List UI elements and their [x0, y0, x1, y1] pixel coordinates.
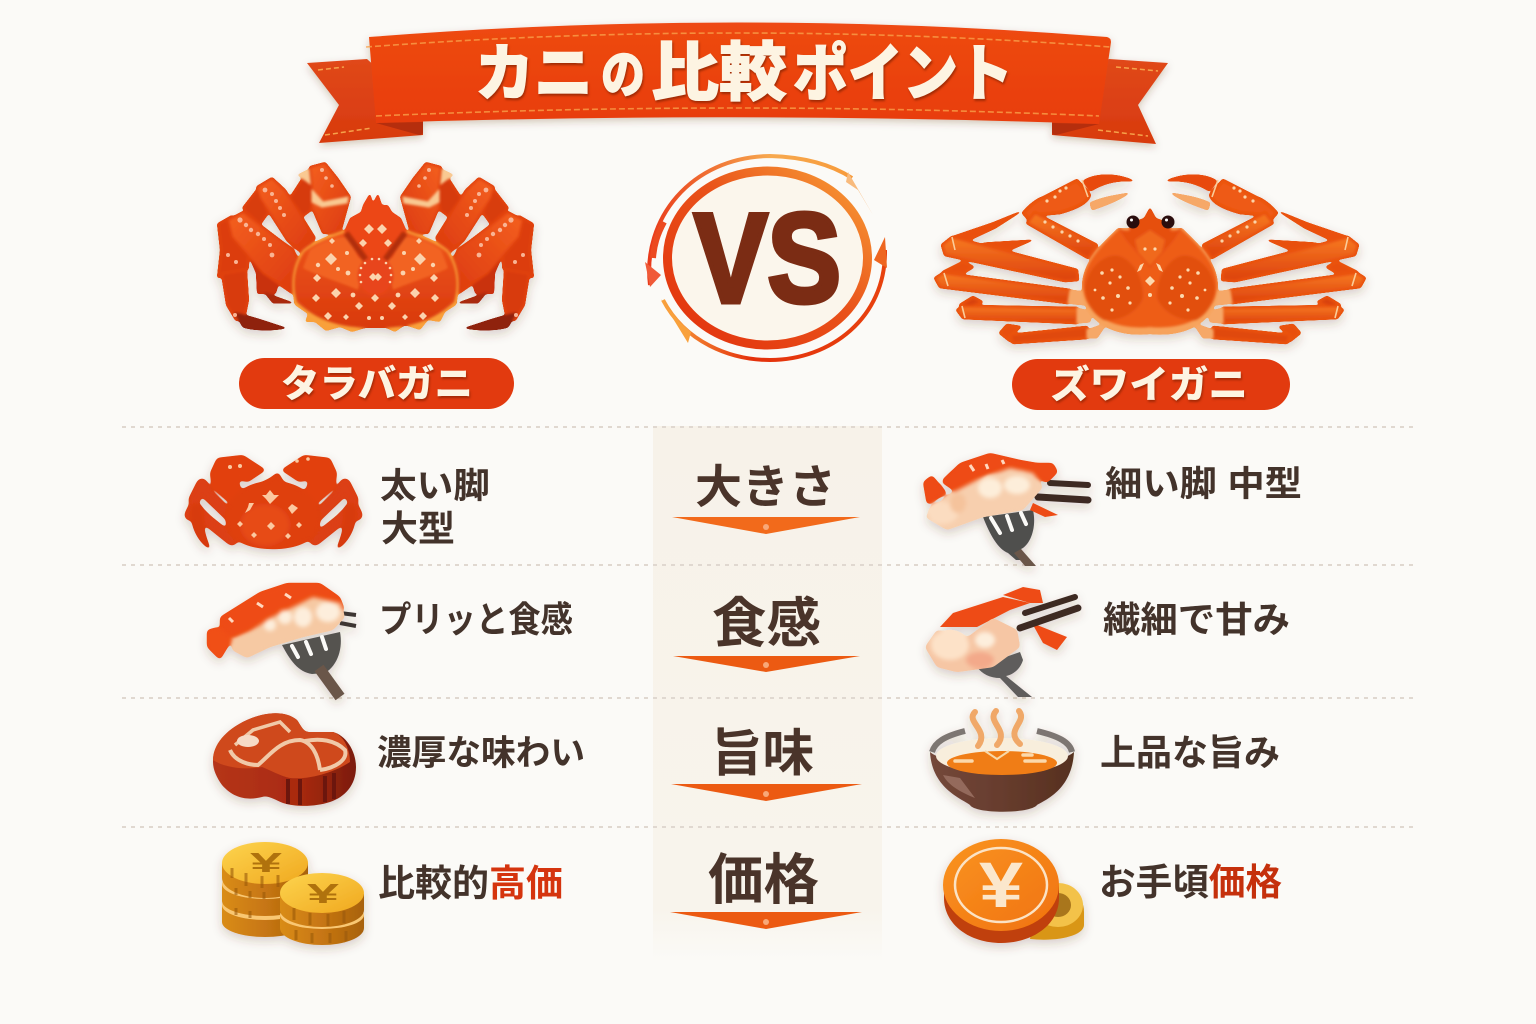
name label: タラバガニ: タラバガニ [281, 364, 473, 406]
icon: crab meat with fork and chopsticks [923, 453, 1088, 566]
left text: プリッと食感 [379, 599, 573, 640]
row: 価格 [222, 839, 1282, 945]
icon: gold coin stacks: ¥ [307, 878, 340, 909]
right text: 繊細で甘み [1103, 599, 1290, 640]
icon: orange yen coin: ¥ [979, 849, 1024, 921]
left text: 濃厚な味わい [377, 734, 585, 773]
title text: ポイント [793, 40, 1013, 109]
center label: 旨味 [711, 725, 814, 782]
center label: 大きさ [695, 461, 836, 513]
center arrow [671, 784, 862, 801]
icon: crab meat on fork [207, 583, 356, 697]
left text: 太い脚 大型: 大型 [381, 508, 455, 549]
right text: お手頃価格 [1099, 862, 1282, 903]
crab illustration: snow crab [935, 175, 1365, 343]
row: 食感 [207, 583, 1290, 697]
left text: 太い脚 大型 [380, 467, 490, 549]
icon: orange yen coin [943, 839, 1084, 943]
icon: crab meat with chopsticks [925, 587, 1078, 697]
center label: 食感 [712, 594, 821, 654]
right text: 上品な旨み [1100, 732, 1280, 773]
row dividers [122, 427, 1414, 827]
row: 旨味 [213, 711, 1280, 812]
icon: steak [213, 713, 356, 806]
icon: gold coin stacks [222, 842, 364, 945]
center arrow [672, 517, 860, 534]
title text: の [601, 47, 645, 105]
name label: ズワイガニ [1012, 359, 1290, 410]
center arrow [673, 656, 860, 672]
row: 大きさ [190, 453, 1302, 566]
name label: ズワイガニ: ズワイガニ [1050, 364, 1248, 407]
icon: bowl of soup [930, 711, 1074, 812]
title text [475, 37, 1013, 109]
center comparison column [653, 426, 882, 962]
icon: small king crab [190, 455, 357, 551]
VS emblem: VS [694, 187, 841, 329]
left text: 太い脚 大型: 太い脚 [380, 467, 490, 506]
title text: 比較 [651, 37, 787, 109]
center arrow [670, 912, 862, 929]
title ribbon [307, 22, 1168, 144]
crab illustration: king crab [218, 163, 533, 332]
right text: 細い脚 中型: 細い脚 中型 [1105, 465, 1302, 504]
title text: カニ [475, 40, 593, 109]
icon: gold coin stacks: ¥ [250, 847, 283, 878]
center label: 価格 [708, 849, 819, 911]
name label: タラバガニ [239, 358, 514, 409]
left text: 比較的高価 [378, 863, 563, 904]
VS emblem [645, 156, 887, 360]
